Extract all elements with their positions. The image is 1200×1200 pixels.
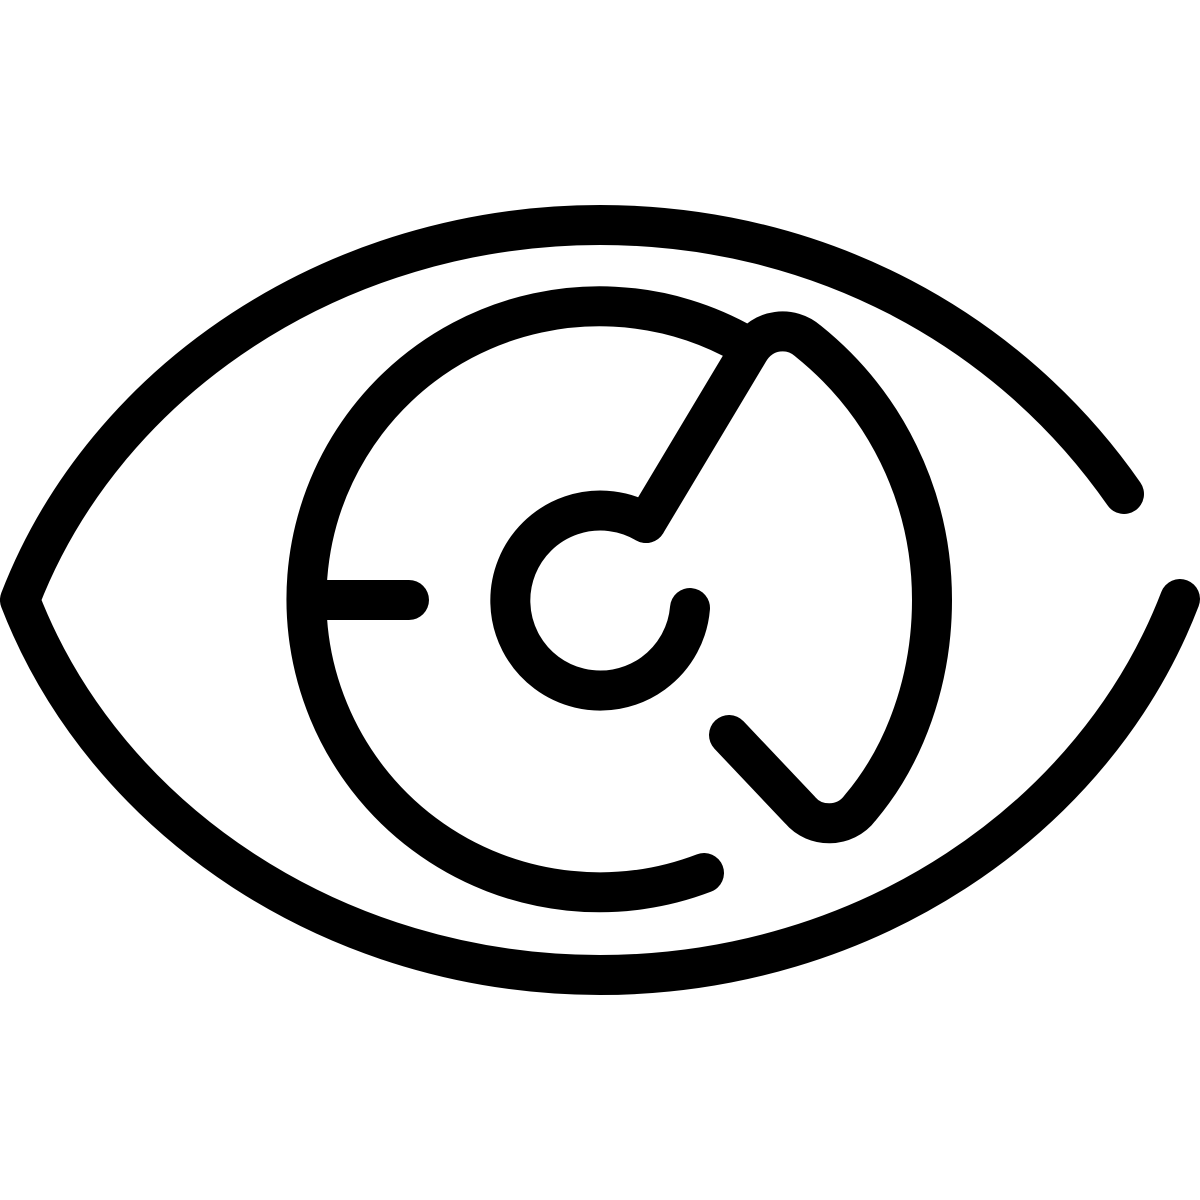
iris right segment bbox=[646, 331, 932, 823]
iris left arc with tick bbox=[306, 306, 745, 892]
pupil bbox=[510, 511, 690, 691]
eye outline bbox=[20, 225, 1180, 975]
